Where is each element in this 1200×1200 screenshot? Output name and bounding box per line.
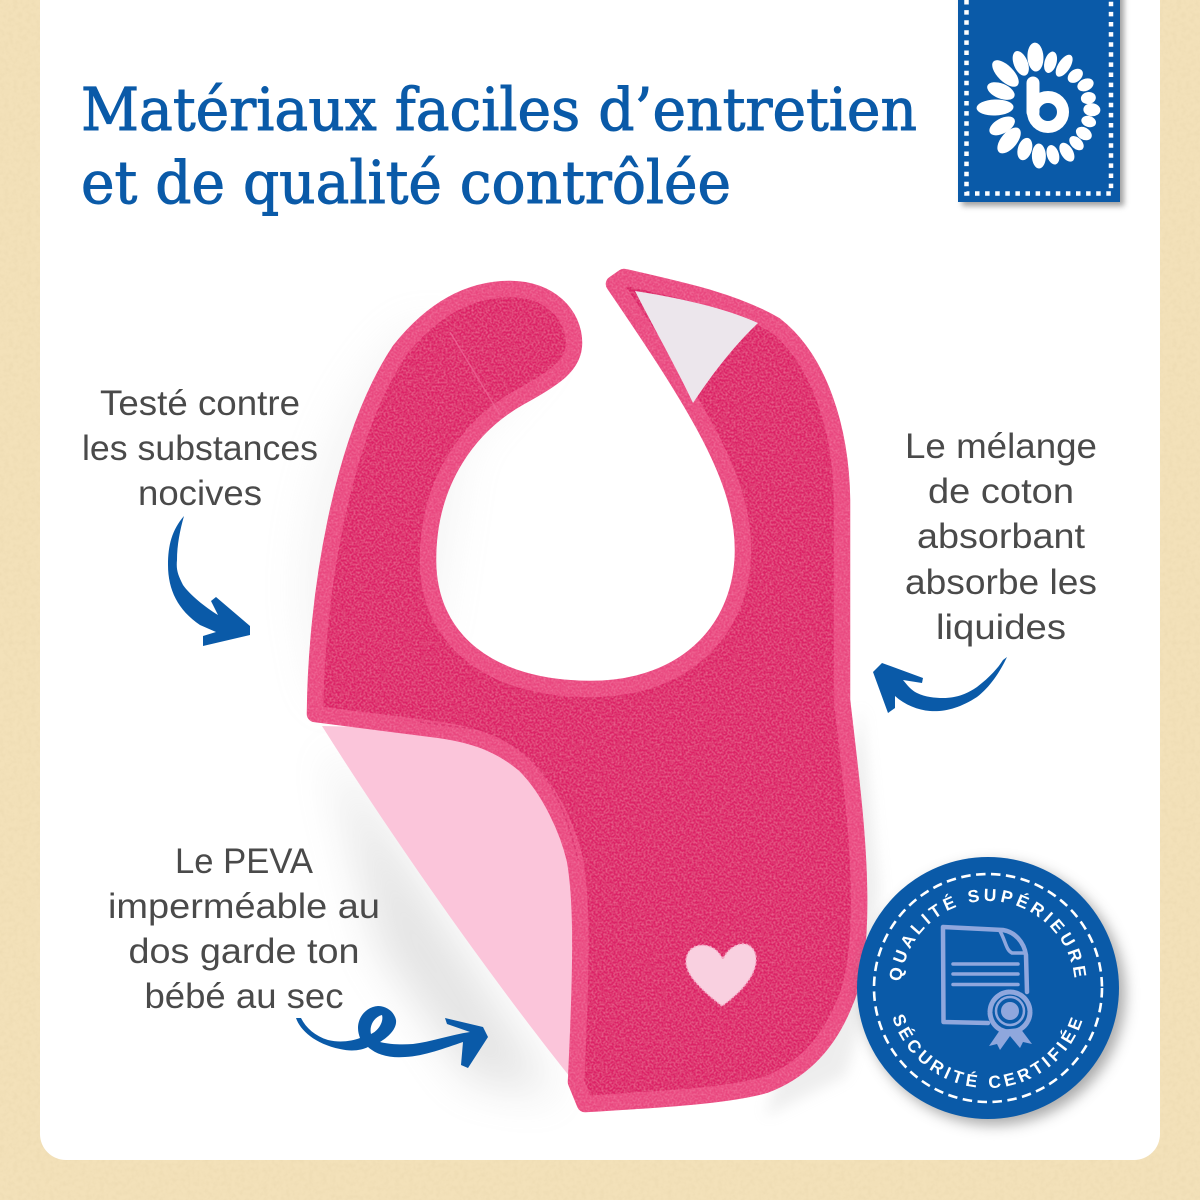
caption: cotton bbox=[905, 426, 1097, 647]
arrow: tested bbox=[168, 516, 250, 646]
badge bbox=[854, 854, 1134, 1134]
bib shadow bbox=[330, 745, 555, 1095]
caption: cotton: liquides bbox=[936, 607, 1066, 647]
caption: PEVA: dos garde ton bbox=[128, 931, 360, 971]
caption: PEVA: Le PEVA bbox=[175, 841, 313, 881]
caption: cotton: absorbe les bbox=[905, 562, 1097, 602]
bib bbox=[304, 277, 879, 1116]
caption: PEVA: imperméable au bbox=[108, 886, 380, 926]
arrow: cotton bbox=[873, 657, 1007, 713]
logo tag bbox=[958, 0, 1124, 206]
fold crease bbox=[450, 332, 500, 415]
title: et de qualité contrôlée bbox=[81, 148, 731, 217]
PEVA underside bbox=[322, 726, 584, 1082]
stitch lines bbox=[420, 722, 578, 860]
caption: tested: les substances bbox=[82, 428, 318, 468]
arrow: PEVA bbox=[296, 1006, 488, 1068]
icon: flower logo bbox=[976, 42, 1101, 169]
title bbox=[81, 75, 917, 217]
caption: tested: nocives bbox=[138, 473, 262, 513]
caption: cotton: Le mélange bbox=[905, 426, 1097, 466]
caption: cotton: de coton bbox=[928, 471, 1074, 511]
caption: PEVA: bébé au sec bbox=[144, 976, 344, 1016]
caption: tested: Testé contre bbox=[100, 383, 300, 423]
icon: certificate bbox=[943, 927, 1032, 1050]
caption: tested bbox=[82, 383, 318, 513]
badge text top: QUALITÉ SUPÉRIEURE bbox=[890, 888, 1086, 980]
badge text bottom: SÉCURITÉ CERTIFIÉE bbox=[893, 1014, 1082, 1088]
title: Matériaux faciles d’entretien bbox=[81, 75, 917, 144]
terry body bbox=[315, 277, 859, 1104]
caption: cotton: absorbant bbox=[917, 516, 1085, 556]
heart embroidery bbox=[686, 944, 756, 1006]
velcro tab bbox=[635, 291, 758, 403]
caption: PEVA bbox=[108, 841, 380, 1016]
